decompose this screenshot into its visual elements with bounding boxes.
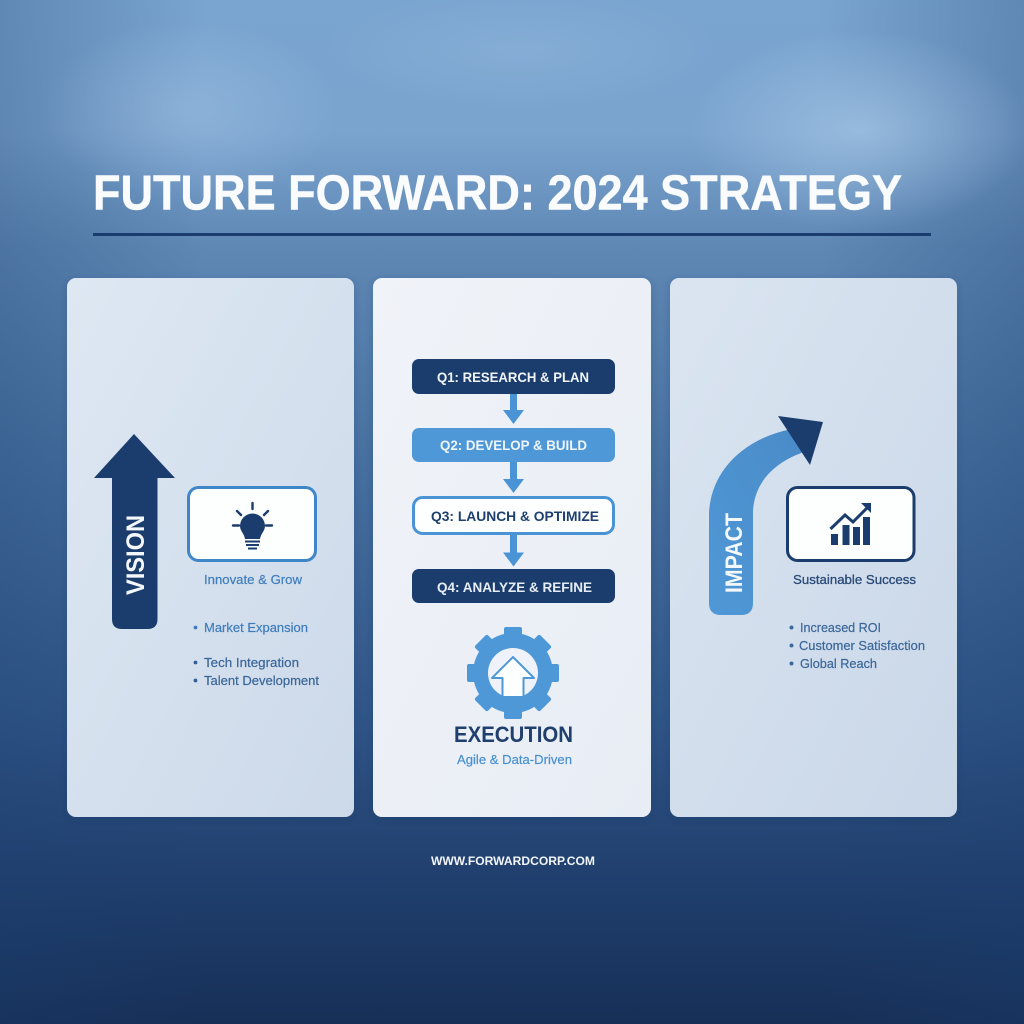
impact curved arrow (709, 416, 823, 615)
vision bullets (194, 620, 319, 688)
title: FUTURE FORWARD: 2024 STRATEGY (93, 166, 902, 220)
execution subtitle: Agile & Data-Driven (457, 752, 572, 767)
vision bullets: Talent Development (204, 673, 319, 688)
impact bullets: Global Reach (800, 656, 877, 671)
vision subtitle: Innovate & Grow (204, 572, 303, 587)
impact label: IMPACT (721, 513, 748, 593)
step Q3 (414, 498, 614, 534)
footer url: WWW.FORWARDCORP.COM (431, 854, 595, 868)
icon card: light bulb (188, 488, 316, 560)
step Q2: Q2: DEVELOP & BUILD (440, 437, 587, 453)
step Q4: Q4: ANALYZE & REFINE (437, 579, 592, 595)
impact bullets: Increased ROI (800, 620, 881, 635)
impact subtitle: Sustainable Success (793, 572, 917, 587)
icon: gear with arrow (467, 627, 559, 719)
impact bullets: Customer Satisfaction (799, 638, 925, 653)
impact bullets (790, 620, 925, 671)
step Q4 (412, 569, 615, 603)
vision bullets: Market Expansion (204, 620, 308, 635)
connector arrows (503, 394, 524, 566)
step Q3: Q3: LAUNCH & OPTIMIZE (431, 508, 599, 524)
panel: impact (670, 278, 957, 817)
execution heading: EXECUTION (454, 722, 573, 747)
icon card: growth chart (788, 488, 914, 560)
vision arrow (94, 434, 175, 629)
step Q1 (412, 359, 615, 394)
step Q1: Q1: RESEARCH & PLAN (437, 369, 589, 385)
vision label: VISION (122, 515, 150, 595)
panel: vision (67, 278, 354, 817)
panel: execution (373, 278, 651, 817)
step Q2 (412, 428, 615, 462)
title underline (93, 233, 931, 236)
vision bullets: Tech Integration (204, 655, 299, 670)
